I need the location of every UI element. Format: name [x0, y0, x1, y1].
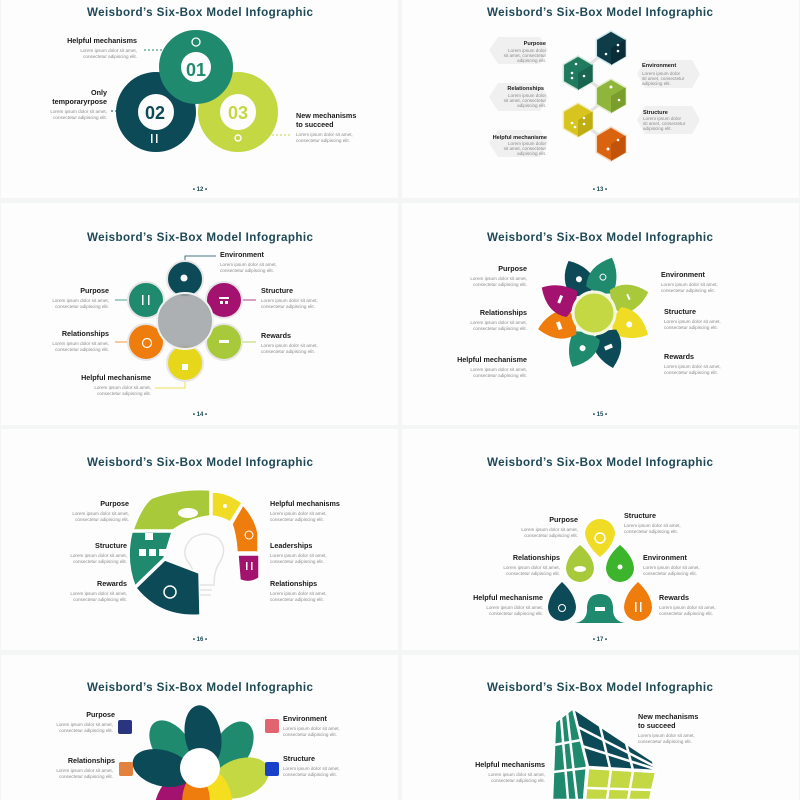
- label: only temporary: consectetur adipiscing elit.: [53, 115, 107, 120]
- text: structure: Lorem ipsum dolor: [643, 116, 682, 121]
- text: structure: [643, 110, 686, 131]
- text: purpose: [504, 41, 546, 63]
- labels 16: consectetur adipiscing elit.: [75, 517, 129, 522]
- labels 14: Helpful mechanisme: [81, 373, 151, 382]
- slide 15: petals: [457, 231, 721, 418]
- labels 15: Lorem ipsum dolor sit amet,: [664, 364, 721, 369]
- labels 19: to succeed: [638, 721, 676, 730]
- labels 14: Structure: [261, 286, 293, 295]
- labels 15: [457, 264, 721, 378]
- text: environment: adipiscing elit.: [642, 81, 671, 86]
- labels 17: consectetur adipiscing elit.: [524, 533, 578, 538]
- labels 16: Structure: [95, 541, 127, 550]
- labels 16: Lorem ipsum dolor sit amet,: [72, 511, 129, 516]
- circles 14: [128, 261, 242, 381]
- labels 15: Helpful mechanisme: [457, 355, 527, 364]
- slide 19: cube: [475, 681, 714, 800]
- labels 16: Leaderships: [270, 541, 312, 550]
- labels 14: Lorem ipsum dolor sit amet,: [261, 343, 318, 348]
- ring 03: 03: [228, 103, 248, 123]
- labels 18: consectetur adipiscing elit.: [283, 772, 337, 777]
- flower petals: [128, 702, 275, 800]
- labels 17: consectetur adipiscing elit.: [506, 571, 560, 576]
- labels 14: consectetur adipiscing elit.: [97, 391, 151, 396]
- labels 16: Helpful mechanisms: [270, 499, 340, 508]
- labels 19: New mechanisms: [638, 712, 698, 721]
- labels 16: Lorem ipsum dolor sit amet,: [70, 553, 127, 558]
- text: helpful mechanisme: Lorem ipsum dolor: [508, 141, 546, 146]
- text: helpful mechanisme: Helpful mechanisme: [493, 135, 547, 141]
- slide 14: six circles: [52, 231, 318, 418]
- text: purpose: adipiscing elit.: [517, 58, 546, 63]
- text: purpose: Purpose: [524, 41, 546, 47]
- labels 17: consectetur adipiscing elit.: [624, 529, 678, 534]
- labels 17: Environment: [643, 553, 688, 562]
- label: new mechanisms: [264, 111, 356, 143]
- labels 17: consectetur adipiscing elit.: [643, 571, 697, 576]
- labels 16: Purpose: [100, 499, 129, 508]
- label: only temporary: Only: [91, 88, 107, 97]
- labels 16: consectetur adipiscing elit.: [270, 597, 324, 602]
- labels 17: Lorem ipsum dolor sit amet,: [659, 605, 716, 610]
- label: only temporary: Lorem ipsum dolor sit amet,: [50, 109, 107, 114]
- dice: [563, 31, 626, 161]
- connector lines 14: [115, 256, 256, 388]
- text: structure: adipiscing elit.: [643, 126, 672, 131]
- title 15: Weisbord’s Six-Box Model Infographic: [487, 231, 714, 244]
- icons 14: [142, 274, 229, 370]
- drops 17: [548, 519, 652, 623]
- labels 15: consectetur adipiscing elit.: [473, 282, 527, 287]
- slide 18: flower: [56, 681, 340, 800]
- labels 18: Lorem ipsum dolor sit amet,: [283, 766, 340, 771]
- text: helpful mechanisme: sit amet, consectetur: [504, 146, 546, 151]
- labels 15: Lorem ipsum dolor sit amet,: [661, 282, 718, 287]
- page 15: • 15 •: [593, 412, 607, 418]
- text: relationships: adipiscing elit.: [517, 103, 546, 108]
- labels 16: [70, 499, 340, 602]
- label: helpful mechanisms: [67, 36, 172, 59]
- labels 17: [473, 511, 716, 616]
- labels 18: Environment: [283, 714, 328, 723]
- labels 15: Environment: [661, 270, 706, 279]
- text: helpful mechanisme: [493, 135, 547, 156]
- page 13: • 13 •: [593, 187, 607, 193]
- bulb outline: [185, 534, 224, 595]
- labels 17: consectetur adipiscing elit.: [489, 611, 543, 616]
- icon boxes 18: [118, 719, 279, 776]
- icons 16: [139, 504, 253, 598]
- labels 16: Lorem ipsum dolor sit amet,: [70, 591, 127, 596]
- labels 15: Purpose: [498, 264, 527, 273]
- page 12: • 12 •: [193, 187, 207, 193]
- title 12: Weisbord’s Six-Box Model Infographic: [87, 6, 314, 19]
- labels 14: Lorem ipsum dolor sit amet,: [94, 385, 151, 390]
- labels 16: Relationships: [270, 579, 317, 588]
- title 13: Weisbord’s Six-Box Model Infographic: [487, 6, 714, 19]
- labels 18: consectetur adipiscing elit.: [59, 774, 113, 779]
- text: environment: Environment: [642, 63, 676, 69]
- labels 18: Relationships: [68, 756, 115, 765]
- labels 14: consectetur adipiscing elit.: [55, 304, 109, 309]
- petals 15: [535, 253, 654, 373]
- label: only temporary: temporaryrpose: [52, 97, 107, 106]
- labels 14: Environment: [220, 250, 265, 259]
- ring 01: 01: [186, 60, 206, 80]
- labels 14: Lorem ipsum dolor sit amet,: [220, 262, 277, 267]
- labels 14: consectetur adipiscing elit.: [220, 268, 274, 273]
- text: environment: Lorem ipsum dolor: [642, 71, 681, 76]
- labels 14: Lorem ipsum dolor sit amet,: [52, 341, 109, 346]
- labels 19: Helpful mechanisms: [475, 760, 545, 769]
- icons 17: [558, 533, 642, 612]
- labels 14: Lorem ipsum dolor sit amet,: [52, 298, 109, 303]
- labels 18: Purpose: [86, 710, 115, 719]
- labels 16: consectetur adipiscing elit.: [270, 559, 324, 564]
- slide 16: bulb segments: [70, 456, 340, 643]
- labels 17: Structure: [624, 511, 656, 520]
- text: helpful mechanisme: adipiscing elit.: [517, 151, 546, 156]
- label: helpful mechanisms: consectetur adipiscing elit.: [83, 54, 137, 59]
- labels 14: Relationships: [62, 329, 109, 338]
- labels 16: Lorem ipsum dolor sit amet,: [270, 511, 327, 516]
- labels 16: consectetur adipiscing elit.: [73, 559, 127, 564]
- labels 18: consectetur adipiscing elit.: [283, 732, 337, 737]
- labels 15: consectetur adipiscing elit.: [473, 373, 527, 378]
- text: structure: Structure: [643, 110, 668, 116]
- page 17: • 17 •: [593, 637, 607, 643]
- page 14: • 14 •: [193, 412, 207, 418]
- labels 15: Lorem ipsum dolor sit amet,: [664, 319, 721, 324]
- labels 15: Lorem ipsum dolor sit amet,: [470, 367, 527, 372]
- text: relationships: [504, 86, 546, 108]
- label: helpful mechanisms: Helpful mechanisms: [67, 36, 137, 45]
- labels 16: consectetur adipiscing elit.: [73, 597, 127, 602]
- text: environment: [642, 63, 685, 86]
- title 17: Weisbord’s Six-Box Model Infographic: [487, 456, 714, 469]
- labels 18: Lorem ipsum dolor sit amet,: [283, 726, 340, 731]
- labels 15: Relationships: [480, 308, 527, 317]
- labels 14: [52, 250, 318, 396]
- labels 15: consectetur adipiscing elit.: [664, 325, 718, 330]
- labels 16: Lorem ipsum dolor sit amet,: [270, 553, 327, 558]
- label: new mechanisms: Lorem ipsum dolor sit amet,: [296, 132, 353, 137]
- ring 03: [209, 83, 267, 141]
- text: relationships: sit amet, consectetur: [504, 98, 546, 103]
- labels 14: consectetur adipiscing elit.: [261, 349, 315, 354]
- labels 15: consectetur adipiscing elit.: [661, 288, 715, 293]
- text: relationships: Lorem ipsum dolor: [508, 93, 546, 98]
- center circle 15: [573, 292, 615, 334]
- title 19: Weisbord’s Six-Box Model Infographic: [487, 681, 714, 694]
- text: relationships: Relationships: [507, 86, 544, 92]
- labels 17: Relationships: [513, 553, 560, 562]
- labels 17: Rewards: [659, 593, 689, 602]
- labels 19: Lorem ipsum dolor sit amet,: [488, 772, 545, 777]
- label: helpful mechanisms: Lorem ipsum dolor sit amet,: [80, 48, 137, 53]
- labels 15: consectetur adipiscing elit.: [664, 370, 718, 375]
- labels 15: Lorem ipsum dolor sit amet,: [470, 320, 527, 325]
- labels 14: Lorem ipsum dolor sit amet,: [261, 298, 318, 303]
- labels 15: Lorem ipsum dolor sit amet,: [470, 276, 527, 281]
- label: only temporary: [50, 88, 118, 120]
- label hexagons: [489, 37, 700, 157]
- labels 15: consectetur adipiscing elit.: [473, 326, 527, 331]
- labels 15: Rewards: [664, 352, 694, 361]
- labels 17: Lorem ipsum dolor sit amet,: [503, 565, 560, 570]
- labels 18: Structure: [283, 754, 315, 763]
- labels 17: Lorem ipsum dolor sit amet,: [486, 605, 543, 610]
- ring 01: [170, 38, 222, 93]
- text: environment: sit amet, consectetur: [642, 76, 685, 81]
- labels 17: Helpful mechanisme: [473, 593, 543, 602]
- labels 14: consectetur adipiscing elit.: [55, 347, 109, 352]
- labels 14: Purpose: [80, 286, 109, 295]
- labels 19: consectetur adipiscing elit.: [638, 739, 692, 744]
- labels 18: Lorem ipsum dolor sit amet,: [56, 768, 113, 773]
- labels 17: Lorem ipsum dolor sit amet,: [521, 527, 578, 532]
- page 16: • 16 •: [193, 637, 207, 643]
- label: new mechanisms: New mechanisms: [296, 111, 356, 120]
- labels 16: consectetur adipiscing elit.: [270, 517, 324, 522]
- text: structure: sit amet, consectetur: [643, 121, 686, 126]
- text: purpose: Lorem ipsum dolor: [508, 48, 546, 53]
- labels 19: [475, 712, 698, 783]
- labels 18: consectetur adipiscing elit.: [59, 728, 113, 733]
- labels 14: consectetur adipiscing elit.: [261, 304, 315, 309]
- labels 18: Lorem ipsum dolor sit amet,: [56, 722, 113, 727]
- ring 02: 02: [145, 103, 165, 123]
- labels 14: Rewards: [261, 331, 291, 340]
- labels 19: consectetur adipiscing elit.: [491, 778, 545, 783]
- labels 16: Lorem ipsum dolor sit amet,: [270, 591, 327, 596]
- slide 13: dice: [487, 6, 714, 193]
- labels 19: Lorem ipsum dolor sit amet,: [638, 733, 695, 738]
- label: new mechanisms: to succeed: [296, 120, 334, 129]
- labels 17: consectetur adipiscing elit.: [659, 611, 713, 616]
- labels 17: Lorem ipsum dolor sit amet,: [624, 523, 681, 528]
- title 18: Weisbord’s Six-Box Model Infographic: [87, 681, 314, 694]
- labels 18: [56, 710, 340, 779]
- title 14: Weisbord’s Six-Box Model Infographic: [87, 231, 314, 244]
- cube: [552, 708, 656, 800]
- labels 17: Lorem ipsum dolor sit amet,: [643, 565, 700, 570]
- segments 16: [129, 490, 259, 615]
- connector lines: [578, 48, 611, 144]
- ring 02: [127, 83, 185, 143]
- title 16: Weisbord’s Six-Box Model Infographic: [87, 456, 314, 469]
- label: new mechanisms: consectetur adipiscing elit.: [296, 138, 350, 143]
- slide 12: three rings: [50, 6, 356, 193]
- text: purpose: sit amet, consectetur: [504, 53, 546, 58]
- labels 17: Purpose: [549, 515, 578, 524]
- slide 17: drops triangle: [473, 456, 716, 643]
- labels 16: Rewards: [97, 579, 127, 588]
- labels 15: Structure: [664, 307, 696, 316]
